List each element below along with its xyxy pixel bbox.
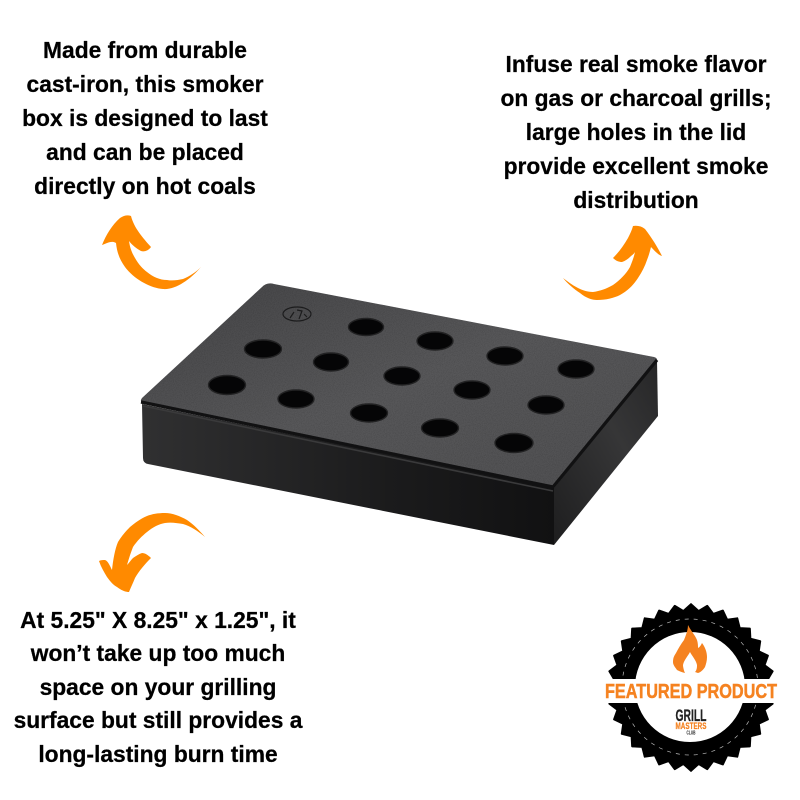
logo: grill masters club <box>676 706 706 736</box>
text block: top left: directly on hot coals <box>34 173 256 199</box>
lid texture <box>141 283 657 487</box>
lid edge highlight <box>143 406 553 491</box>
lid holes <box>208 318 594 452</box>
embossed logo <box>283 307 311 321</box>
box lid <box>141 283 657 487</box>
product: cast-iron smoker box <box>141 283 658 545</box>
text block: top right: on gas or charcoal grills; <box>500 85 772 111</box>
text block: top left: box is designed to last <box>22 105 268 131</box>
text block: top left: Made from durable <box>43 37 247 63</box>
box front face <box>142 404 554 545</box>
text block: top left <box>22 37 268 200</box>
text block: top right: provide excellent smoke <box>504 153 768 179</box>
badge white centre <box>635 632 745 742</box>
text block: bottom left: won’t take up too much <box>31 640 285 666</box>
text block: bottom left: long-lasting burn time <box>38 741 278 767</box>
text block: top right <box>500 51 772 213</box>
icon: flame <box>673 625 707 673</box>
arrow: top left <box>102 215 201 289</box>
logo: grill masters club: GRILL <box>676 706 706 725</box>
text block: top right: Infuse real smoke flavor <box>505 51 766 77</box>
badge white band <box>600 679 782 703</box>
arrow: top right <box>563 226 662 300</box>
text block: bottom left: surface but still provides a <box>14 707 302 733</box>
box right side face <box>554 360 658 545</box>
text block: bottom left: space on your grilling <box>40 674 276 700</box>
badge: featured product <box>600 604 782 771</box>
text block: top right: distribution <box>573 187 699 213</box>
text block: top left: and can be placed <box>46 139 244 165</box>
text block: top left: cast-iron, this smoker <box>27 71 263 97</box>
lid lip <box>141 360 657 487</box>
arrow: bottom left <box>99 513 205 592</box>
badge scalloped ring <box>608 604 774 771</box>
text block: top right: large holes in the lid <box>526 119 746 145</box>
logo: grill masters club: CLUB <box>686 730 696 736</box>
text block: bottom left: At 5.25" X 8.25" x 1.25", it <box>20 607 296 633</box>
logo: grill masters club: MASTERS <box>676 721 706 731</box>
badge stitching <box>622 619 758 755</box>
text block: bottom left <box>14 607 303 768</box>
